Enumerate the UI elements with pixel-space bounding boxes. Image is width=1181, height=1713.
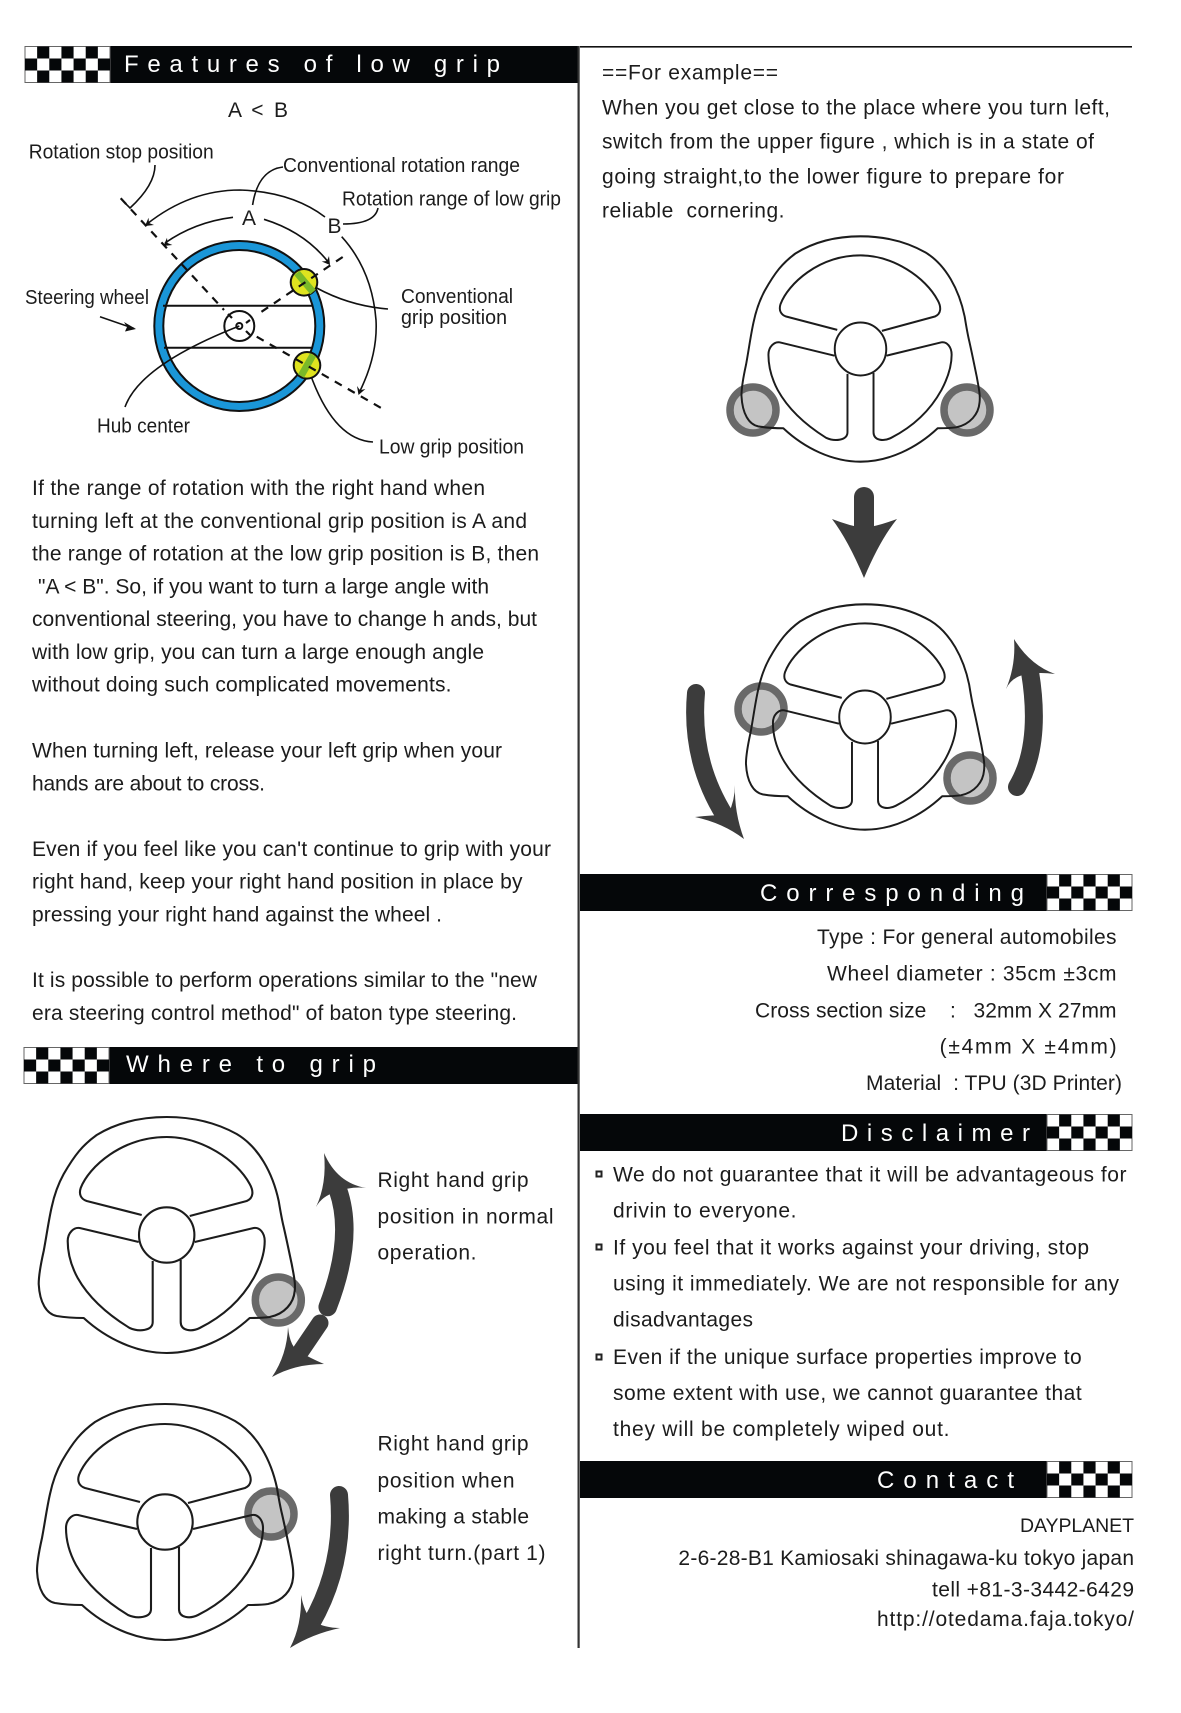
figure: prepared for cornering [695, 604, 1055, 839]
explanation text: When turning left, release your left grip when your [32, 740, 502, 763]
contact details: tell +81-3-3442-6429 [932, 1579, 1134, 1602]
panel: where to grip [24, 1047, 578, 1648]
label: stable right turn: making a stable [378, 1506, 529, 1528]
arrow: turn [290, 1495, 340, 1648]
explanation text: "A < B". So, if you want to turn a large angle with [38, 575, 489, 598]
specification list: Wheel diameter : 35cm ±3cm [827, 962, 1116, 986]
heading: corresponding: Corresponding [760, 880, 1024, 907]
explanation text: era steering control method" of baton type steering. [32, 1002, 517, 1025]
disclaimer bullets: We do not guarantee that it will be advantageous for [613, 1163, 1126, 1186]
explanation text: If the range of rotation with the right hand when [32, 477, 485, 500]
disclaimer bullets [596, 1163, 1126, 1441]
figure: stable right turn grip [37, 1404, 340, 1648]
diagram labels: Low grip position [379, 436, 524, 458]
heading: features of low grip: Features of low grip [124, 51, 500, 78]
label: stable right turn: right turn.(part 1) [378, 1542, 546, 1565]
disclaimer bullets: some extent with use, we cannot guarantee that [613, 1382, 1082, 1405]
explanation text: with low grip, you can turn a large enough angle [31, 641, 484, 664]
explanation text: the range of rotation at the low grip position is B, then [32, 542, 539, 566]
diagram labels: A [242, 207, 256, 230]
contact details: DAYPLANET [1020, 1515, 1134, 1537]
explanation text: hands are about to cross. [32, 772, 265, 795]
example text: ==For example== [602, 62, 778, 84]
arrow: down [272, 1323, 324, 1377]
diagram labels: Steering wheel [25, 287, 149, 309]
diagram labels: B [328, 215, 342, 238]
low grip marker [294, 352, 320, 379]
disclaimer bullets: drivin to everyone. [613, 1200, 796, 1222]
panel: contact [580, 1461, 1134, 1631]
dashed rotation stop lines [121, 198, 382, 408]
diagram labels: Rotation stop position [29, 142, 214, 164]
label: stable right turn [378, 1432, 546, 1565]
diagram labels [25, 142, 561, 458]
diagram labels: grip position [401, 307, 507, 329]
label: normal operation [378, 1169, 554, 1264]
disclaimer bullets: Even if the unique surface properties improve to [613, 1346, 1082, 1369]
arrow: right up [1006, 639, 1055, 787]
steering wheel rim [154, 241, 324, 411]
heading: disclaimer [580, 1114, 1132, 1151]
heading: disclaimer: Disclaimer [841, 1120, 1030, 1147]
label: stable right turn: Right hand grip [378, 1432, 528, 1456]
panel: corresponding [580, 874, 1132, 1095]
panel: disclaimer [580, 1114, 1132, 1441]
heading: features of low grip [25, 46, 578, 83]
conventional grip marker [291, 269, 317, 296]
label: normal operation: operation. [378, 1242, 476, 1264]
specification list: Type : For general automobiles [817, 926, 1116, 949]
disclaimer bullets: they will be completely wiped out. [613, 1418, 950, 1441]
arrow: transition down [832, 497, 897, 578]
explanation text: pressing your right hand against the wheel . [32, 904, 442, 926]
diagram labels: Hub center [97, 416, 190, 438]
explanation text: right hand, keep your right hand position in place by [32, 871, 523, 894]
explanation text: Even if you feel like you can't continue to grip with your [32, 838, 551, 861]
disclaimer bullets: disadvantages [613, 1309, 753, 1332]
heading: contact: Contact [877, 1467, 1014, 1494]
heading: where to grip: Where to grip [126, 1051, 376, 1078]
disclaimer bullets: using it immediately. We are not responsible for any [613, 1273, 1120, 1296]
panel: features of low grip [25, 46, 578, 1025]
heading: corresponding [580, 874, 1132, 911]
heading: where to grip [24, 1047, 578, 1084]
specification list: (±4mm X ±4mm) [940, 1036, 1117, 1058]
specification list [755, 926, 1122, 1095]
example text: reliable cornering. [602, 200, 784, 222]
example text: going straight,to the lower figure to prepare for [602, 166, 1064, 188]
label: stable right turn: position when [378, 1470, 514, 1492]
diagram labels: Conventional rotation range [283, 155, 520, 177]
label: normal operation: position in normal [378, 1206, 554, 1228]
explanation text: It is possible to perform operations similar to the "new [32, 969, 538, 992]
explanation text: turning left at the conventional grip position is A and [32, 510, 527, 533]
disclaimer bullets: If you feel that it works against your driving, stop [613, 1237, 1089, 1260]
arrow: left down [695, 693, 744, 839]
contact details [678, 1515, 1134, 1631]
example text: When you get close to the place where you turn left, [602, 96, 1110, 120]
explanation text [31, 477, 551, 1025]
label: normal operation: Right hand grip [378, 1169, 528, 1192]
example text: switch from the upper figure , which is in a state of [602, 130, 1094, 154]
diagram labels: Conventional [401, 286, 513, 308]
figure: normal operation grip [39, 1117, 366, 1377]
example text [602, 62, 1110, 222]
leader lines [100, 165, 388, 442]
specification list: Cross section size : 32mm X 27mm [755, 1000, 1116, 1022]
arrow: up [316, 1153, 366, 1307]
top rule [580, 46, 1132, 48]
heading: contact [580, 1461, 1132, 1498]
contact details: http://otedama.faja.tokyo/ [877, 1608, 1134, 1631]
contact details: 2-6-28-B1 Kamiosaki shinagawa-ku tokyo japan [678, 1547, 1134, 1570]
explanation text: conventional steering, you have to change h ands, but [32, 608, 537, 631]
explanation text: without doing such complicated movements. [31, 674, 452, 697]
column divider [578, 46, 580, 1648]
diagram labels: Rotation range of low grip [342, 188, 561, 210]
figure: going straight [730, 236, 990, 462]
panel: example [602, 62, 1110, 839]
range arcs [145, 190, 376, 395]
specification list: Material : TPU (3D Printer) [866, 1072, 1122, 1095]
formula: A < B [228, 99, 288, 122]
diagram: rotation range [25, 142, 561, 458]
